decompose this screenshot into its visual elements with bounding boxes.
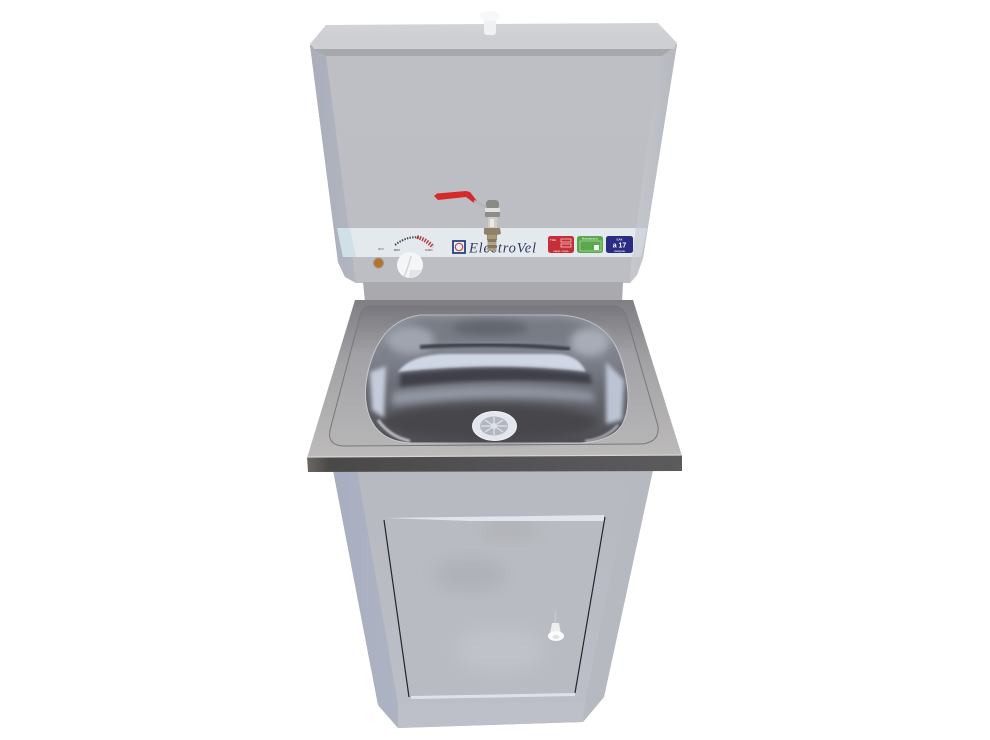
cabinet base xyxy=(398,702,585,728)
water tank xyxy=(310,11,677,302)
tank silhouette xyxy=(310,44,677,283)
bowl upper wall xyxy=(382,318,612,354)
blue badge: а 17 xyxy=(613,242,626,250)
green badge: безопасность xyxy=(582,236,599,240)
blue badge: БАК xyxy=(616,238,623,242)
cabinet front xyxy=(333,470,653,728)
blue badge xyxy=(606,236,633,253)
cabinet door xyxy=(384,515,605,699)
tank right side xyxy=(630,44,677,283)
door knob xyxy=(548,612,564,641)
sink flange xyxy=(330,306,658,446)
red badge: нерж. сталь xyxy=(553,249,569,253)
sink rim xyxy=(307,300,682,458)
cabinet right side xyxy=(583,470,653,722)
bowl side reflections xyxy=(370,366,386,418)
bowl reflections xyxy=(398,354,586,372)
sink xyxy=(307,300,682,472)
brand name: ElectroVel xyxy=(468,240,536,256)
neck below tank xyxy=(363,282,623,302)
basin bowl xyxy=(365,315,628,443)
label band xyxy=(337,228,647,257)
tank lid xyxy=(310,23,677,56)
cabinet left side xyxy=(333,470,398,728)
tap with red lever xyxy=(434,191,501,251)
temperature scale xyxy=(378,237,433,252)
temperature scale: макс xyxy=(425,248,433,252)
green badge xyxy=(577,236,603,253)
sink front edge xyxy=(307,455,682,472)
indicator lamp xyxy=(374,258,384,268)
brand logo xyxy=(453,241,465,253)
tank front panel xyxy=(325,56,661,283)
blue badge: литров xyxy=(614,249,625,253)
tank left side xyxy=(310,45,356,283)
bowl crease xyxy=(420,345,570,349)
red badge: ТЭН xyxy=(550,238,556,242)
temperature scale: вкл xyxy=(378,247,384,251)
red badge xyxy=(548,236,574,253)
drain xyxy=(472,412,516,440)
filler cap xyxy=(480,11,500,35)
thermostat knob xyxy=(397,252,423,278)
temperature scale: мин xyxy=(394,248,400,252)
cabinet xyxy=(333,470,653,728)
